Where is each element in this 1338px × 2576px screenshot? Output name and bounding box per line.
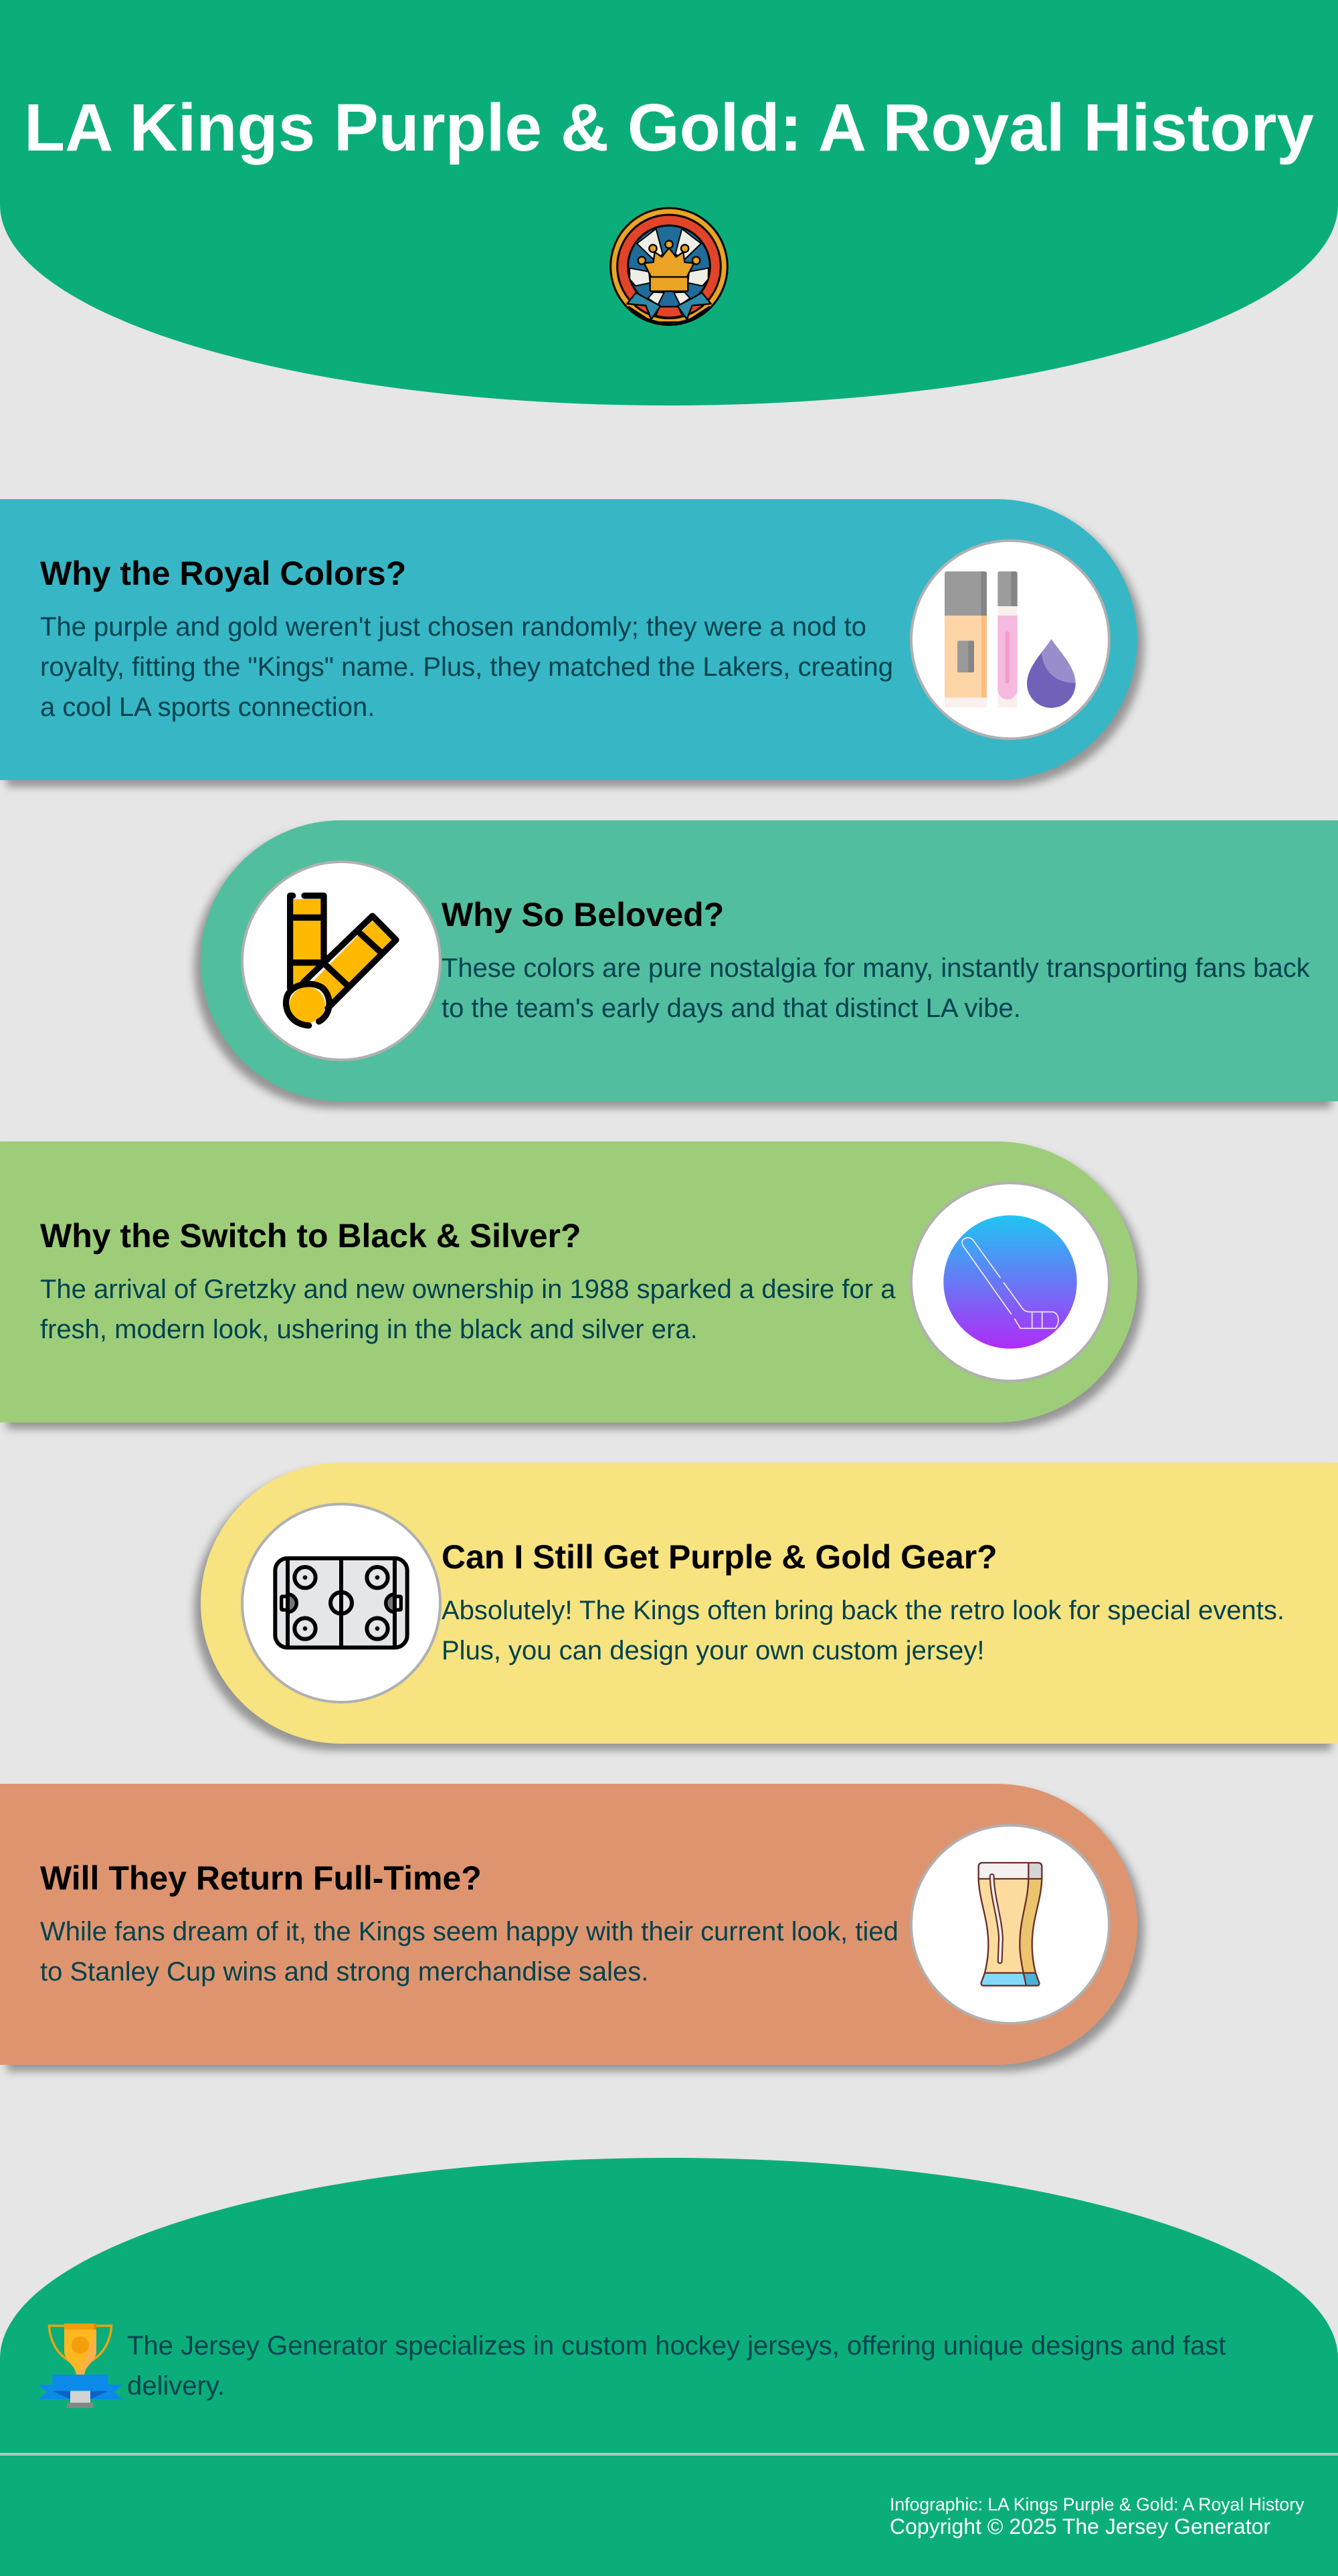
footer panel <box>0 2158 1338 2576</box>
text block: to Stanley Cup wins and strong merchandise sales. <box>40 1957 648 1987</box>
panel: why the switch to black and silver <box>0 1141 1137 1422</box>
text block: The purple and gold weren't just chosen randomly; they were a nod to <box>40 612 866 642</box>
icon circle: swatch <box>241 860 442 1061</box>
text block <box>40 1917 898 1987</box>
text block <box>40 1275 895 1344</box>
header banner <box>0 0 1338 405</box>
icon: hockey rink <box>273 1556 409 1650</box>
divider <box>0 2453 1338 2456</box>
icon: hockey stick on gradient disc <box>943 1215 1077 1349</box>
panel: why the royal colors <box>0 499 1137 780</box>
text block <box>442 1596 1284 1665</box>
credit: Copyright © 2025 The Jersey Generator <box>890 2514 1270 2539</box>
footer text block: delivery. <box>127 2371 225 2401</box>
icon: trophy on ribbon <box>39 2323 122 2408</box>
text block <box>442 953 1310 1023</box>
heading: Can I Still Get Purple & Gold Gear? <box>442 1538 997 1576</box>
icon circle: stick <box>910 1182 1111 1382</box>
credit: Infographic: LA Kings Purple & Gold: A Royal History <box>890 2494 1304 2514</box>
heading: Why the Switch to Black & Silver? <box>40 1217 581 1255</box>
icon circle: glass <box>910 1824 1111 2025</box>
text block: to the team's early days and that distinct LA vibe. <box>442 994 1021 1023</box>
icon: makeup bottles and drop <box>945 571 1076 708</box>
heading: Why the Royal Colors? <box>40 555 406 592</box>
panel: why so beloved <box>201 820 1338 1101</box>
icon: colour swatch fan <box>282 893 399 1029</box>
icon circle: makeup <box>910 539 1111 740</box>
lower badge <box>628 306 710 323</box>
icon circle: rink <box>241 1503 442 1704</box>
footer text block <box>127 2331 1226 2401</box>
text block: royalty, fitting the "Kings" name. Plus, they matched the Lakers, creating <box>40 652 893 682</box>
text block <box>40 612 893 722</box>
credit <box>890 2494 1305 2539</box>
text block: a cool LA sports connection. <box>40 693 375 722</box>
panel: can I still get gear <box>201 1463 1338 1744</box>
text block: The arrival of Gretzky and new ownership in 1988 sparked a desire for a <box>40 1275 895 1304</box>
footer text block: The Jersey Generator specializes in custom hockey jerseys, offering unique designs and fast <box>127 2331 1226 2361</box>
heading: Why So Beloved? <box>442 896 724 933</box>
panel: will they return full-time <box>0 1784 1137 2065</box>
heading: Will They Return Full-Time? <box>40 1859 482 1897</box>
text block: fresh, modern look, ushering in the black and silver era. <box>40 1315 698 1344</box>
text block: While fans dream of it, the Kings seem happy with their current look, tied <box>40 1917 898 1946</box>
title: LA Kings Purple & Gold: A Royal History <box>24 90 1314 165</box>
icon: pilsner glass <box>978 1861 1042 1987</box>
text block: These colors are pure nostalgia for many, instantly transporting fans back <box>442 953 1310 983</box>
text block: Absolutely! The Kings often bring back the retro look for special events. <box>442 1596 1284 1625</box>
text block: Plus, you can design your own custom jersey! <box>442 1636 985 1665</box>
icon: crown badge <box>609 207 729 327</box>
